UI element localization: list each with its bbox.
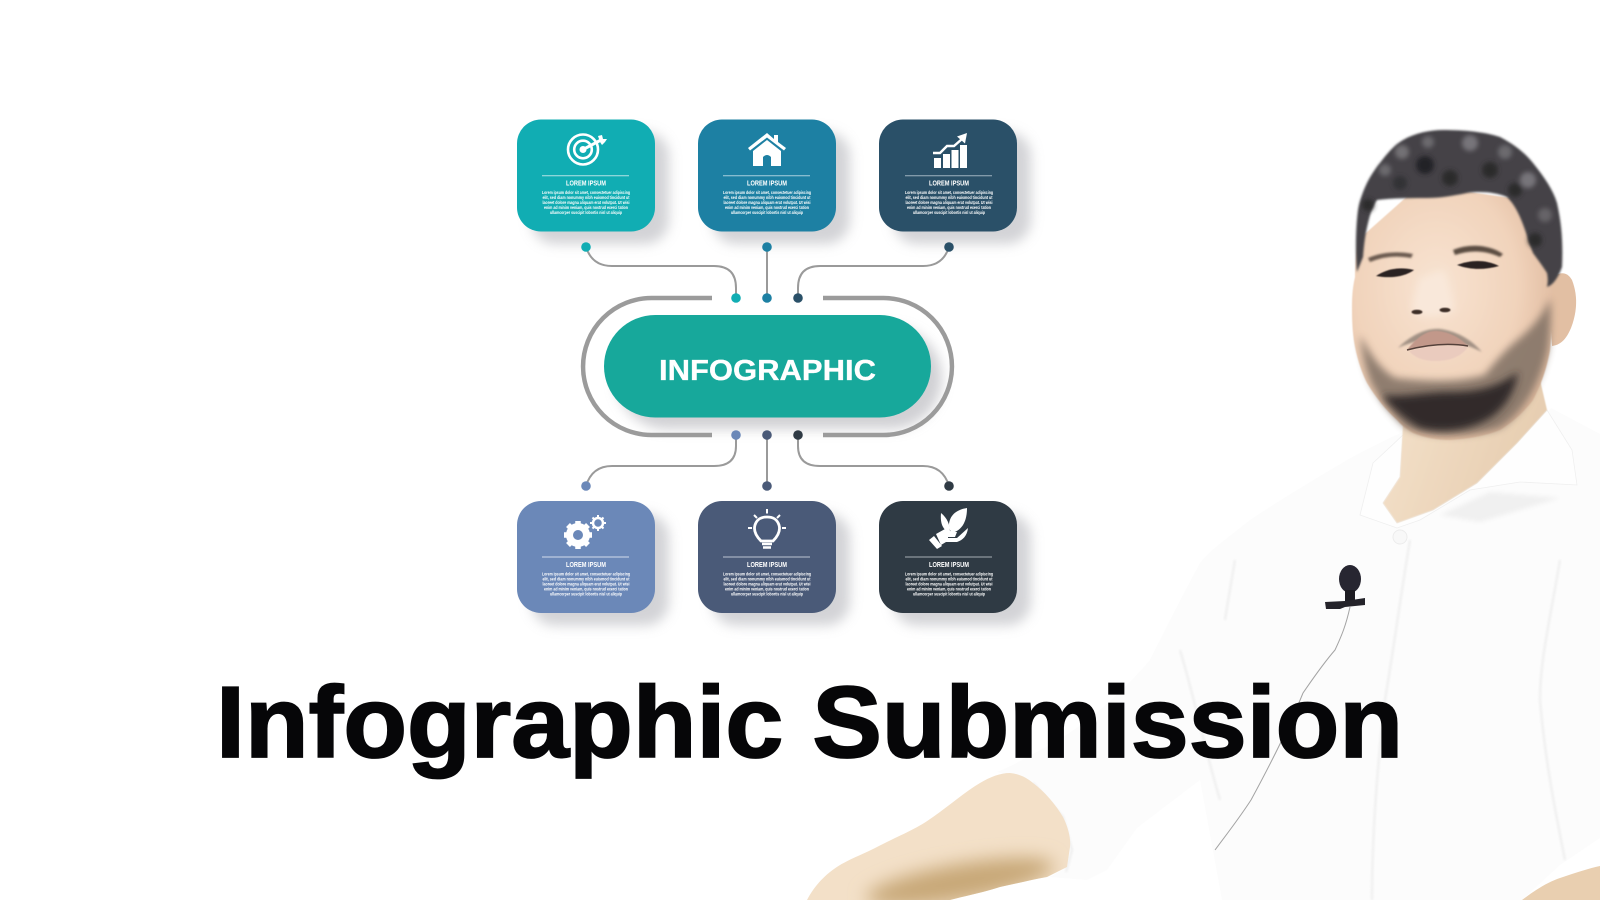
- title: Infographic Submission: [216, 667, 1403, 779]
- icon: gears: [564, 515, 606, 549]
- card 5: light bulb: [698, 501, 850, 626]
- card 5: light bulb: Lorem ipsum dolor sit amet, consectetuer adipiscing: [723, 572, 811, 578]
- icon: growth chart: [933, 133, 967, 168]
- connector dots: [581, 242, 954, 491]
- card 4: gears: ullamcorper suscipit lobortis nisl ut aliquip: [550, 592, 622, 598]
- eyebrows: [1368, 252, 1413, 262]
- central pill: INFOGRAPHIC: [659, 355, 876, 387]
- card 5: light bulb: LOREM IPSUM: [747, 560, 787, 569]
- card 1: target: laoreet dolore magna aliquam erat volutpat. Ut wisi: [542, 200, 630, 206]
- diagram: central infographic: [517, 120, 1031, 626]
- card 2: house: Lorem ipsum dolor sit amet, consectetuer adipiscing: [723, 190, 811, 196]
- card 5: light bulb: laoreet dolore magna aliquam erat volutpat. Ut wisi: [724, 582, 811, 588]
- card 6: plant in hand: laoreet dolore magna aliquam erat volutpat. Ut wisi: [906, 582, 993, 588]
- card 3: growth chart: ullamcorper suscipit lobortis nisl ut aliquip: [913, 210, 985, 216]
- card 6: plant in hand: elit, sed diam nonummy nibh euismod tincidunt ut: [906, 577, 993, 583]
- hair: [1356, 130, 1562, 287]
- card 1: target: Lorem ipsum dolor sit amet, consectetuer adipiscing: [542, 190, 630, 196]
- card 3: growth chart: elit, sed diam nonummy nibh euismod tincidunt ut: [906, 195, 993, 201]
- icon: light bulb: [748, 509, 786, 548]
- card 2: house: elit, sed diam nonummy nibh euismod tincidunt ut: [724, 195, 811, 201]
- central pill shadow: [616, 327, 942, 429]
- forearm right: [1522, 866, 1600, 900]
- card 3: growth chart: laoreet dolore magna aliquam erat volutpat. Ut wisi: [906, 200, 993, 206]
- card 3: growth chart: LOREM IPSUM: [929, 178, 969, 188]
- card 4: gears: laoreet dolore magna aliquam erat volutpat. Ut wisi: [542, 582, 630, 588]
- connector lines: [586, 247, 949, 486]
- outer ring: [583, 298, 952, 435]
- card 4: gears: [517, 501, 669, 626]
- card 4: gears: Lorem ipsum dolor sit amet, consectetuer adipiscing: [542, 572, 630, 578]
- card 3: growth chart: enim ad minim veniam, quis nostrud exerci tation: [907, 205, 991, 211]
- lapel microphone: [1215, 565, 1365, 850]
- card 5: light bulb: ullamcorper suscipit lobortis nisl ut aliquip: [731, 592, 803, 598]
- stubble: [1360, 298, 1551, 435]
- mouth: [1407, 331, 1468, 350]
- card 1: target: ullamcorper suscipit lobortis nisl ut aliquip: [550, 210, 622, 216]
- card 2: house: ullamcorper suscipit lobortis nisl ut aliquip: [731, 210, 803, 216]
- card 2: house: laoreet dolore magna aliquam erat volutpat. Ut wisi: [724, 200, 811, 206]
- icon: house: [748, 133, 786, 166]
- card 4: gears: enim ad minim veniam, quis nostrud exerci tation: [544, 587, 628, 593]
- face skin: [1352, 185, 1552, 440]
- card 1: target: [517, 120, 669, 244]
- card 5: light bulb: enim ad minim veniam, quis nostrud exerci tation: [725, 587, 809, 593]
- presenter photo illustration: [807, 130, 1600, 900]
- card 3: growth chart: Lorem ipsum dolor sit amet, consectetuer adipiscing: [905, 190, 993, 196]
- card 6: plant in hand: [879, 501, 1031, 626]
- goatee: [1382, 372, 1518, 431]
- central pill: [604, 315, 931, 418]
- card 4: gears: LOREM IPSUM: [566, 560, 606, 569]
- forearm left: [807, 773, 1070, 900]
- icon: target: [568, 134, 607, 164]
- card 1: target: enim ad minim veniam, quis nostrud exerci tation: [544, 205, 628, 211]
- card 3: growth chart: [879, 120, 1031, 244]
- eyes: [1376, 268, 1414, 277]
- neck: [1383, 380, 1547, 523]
- nose: [1412, 270, 1455, 316]
- card 1: target: LOREM IPSUM: [566, 178, 606, 188]
- card 1: target: elit, sed diam nonummy nibh euismod tincidunt ut: [542, 195, 630, 201]
- card 5: light bulb: elit, sed diam nonummy nibh euismod tincidunt ut: [724, 577, 811, 583]
- ear: [1548, 273, 1576, 346]
- mustache: [1398, 329, 1482, 352]
- card 6: plant in hand: ullamcorper suscipit lobortis nisl ut aliquip: [913, 592, 985, 598]
- shirt: [997, 408, 1600, 900]
- card 2: house: LOREM IPSUM: [747, 178, 787, 188]
- card 4: gears: elit, sed diam nonummy nibh euismod tincidunt ut: [542, 577, 630, 583]
- card 6: plant in hand: Lorem ipsum dolor sit amet, consectetuer adipiscing: [905, 572, 993, 578]
- card 2: house: [698, 120, 850, 244]
- icon: plant in hand: [929, 508, 968, 549]
- card 2: house: enim ad minim veniam, quis nostrud exerci tation: [725, 205, 809, 211]
- card 6: plant in hand: enim ad minim veniam, quis nostrud exerci tation: [907, 587, 991, 593]
- card 6: plant in hand: LOREM IPSUM: [929, 560, 969, 569]
- head: [1352, 130, 1576, 440]
